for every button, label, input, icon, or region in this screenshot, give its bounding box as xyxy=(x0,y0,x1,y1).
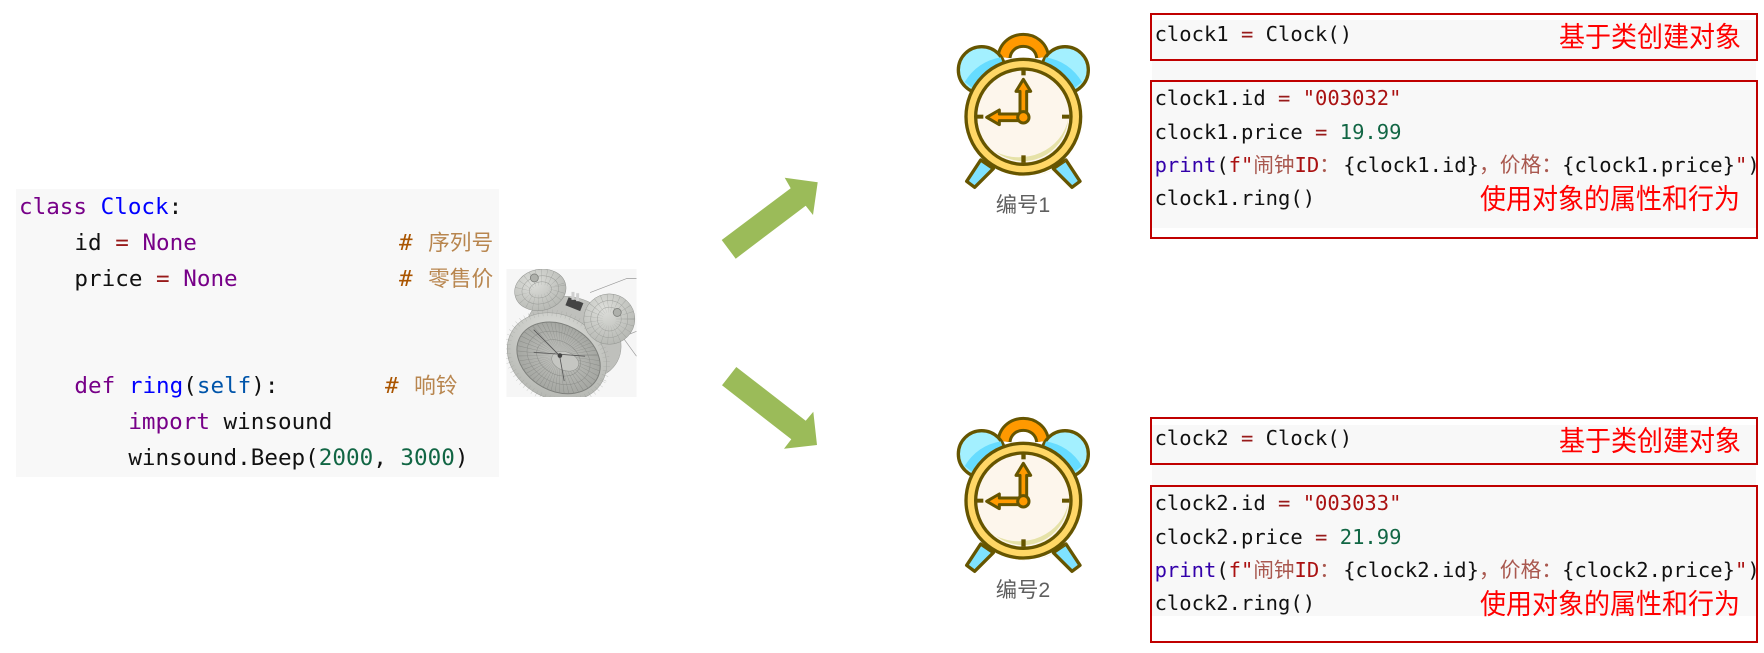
code line: class header: class Clock: xyxy=(19,194,182,220)
box: use object 2 xyxy=(1150,485,1758,643)
code: print clock2: ： xyxy=(1319,553,1340,583)
code line: price attribute: price = None xyxy=(74,266,238,292)
code background 2 xyxy=(1152,425,1756,616)
code: clock2 id: clock2.id = "003033" xyxy=(1155,491,1401,515)
box: use object 1 xyxy=(1150,80,1758,239)
code: clock1 ring: clock1.ring() xyxy=(1155,186,1315,210)
box: create object 1 xyxy=(1150,13,1758,61)
code line: ring method: def ring(self): xyxy=(74,373,279,399)
note: use object attributes and behavior: 使用对象的属性和行为 xyxy=(1480,178,1740,217)
note: create object from class: 基于类创建对象 xyxy=(1559,420,1741,459)
code background 1 xyxy=(1152,20,1756,228)
code: print clock1: print(f"闹钟ID {clock1.id}，价格：{clock1.price}") xyxy=(1155,148,1760,178)
comment: serial number: # 序列号 xyxy=(399,226,493,257)
note: create object from class: 基于类创建对象 xyxy=(1559,16,1741,55)
comment: retail price: # 零售价 xyxy=(399,262,493,293)
box: create object 2 xyxy=(1150,417,1758,465)
panel: object 2 code xyxy=(1150,417,1760,643)
code: print clock1: ： xyxy=(1319,148,1340,178)
code: create clock2: clock2 = Clock() xyxy=(1155,426,1352,450)
code: print clock2: print(f"闹钟ID {clock2.id}，价格：{clock2.price}") xyxy=(1155,553,1760,583)
arrow: down to object 2 xyxy=(722,367,817,449)
image: wireframe alarm clock xyxy=(506,269,637,397)
icon: alarm clock 2 xyxy=(956,416,1090,574)
code: clock1 price: clock1.price = 19.99 xyxy=(1155,120,1401,144)
note: use object attributes and behavior: 使用对象的属性和行为 xyxy=(1480,583,1740,622)
code: clock2 price: clock2.price = 21.99 xyxy=(1155,525,1401,549)
code line: import winsound: import winsound xyxy=(128,409,332,435)
icon: alarm clock 1 xyxy=(956,32,1090,190)
label: number 2: 编号2 xyxy=(996,578,1050,602)
panel: object 1 code xyxy=(1150,13,1760,239)
code line: beep call: winsound.Beep(2000, 3000) xyxy=(128,445,468,471)
arrow: up to object 1 xyxy=(722,178,818,259)
code: create clock1: clock1 = Clock() xyxy=(1155,22,1352,46)
panel: class Clock code xyxy=(16,189,499,477)
code line: id attribute: id = None xyxy=(74,230,197,256)
label: number 1: 编号1 xyxy=(996,193,1050,217)
comment: ring: # 响铃 xyxy=(385,369,457,400)
code: clock2 ring: clock2.ring() xyxy=(1155,591,1315,615)
code: clock1 id: clock1.id = "003032" xyxy=(1155,86,1401,110)
